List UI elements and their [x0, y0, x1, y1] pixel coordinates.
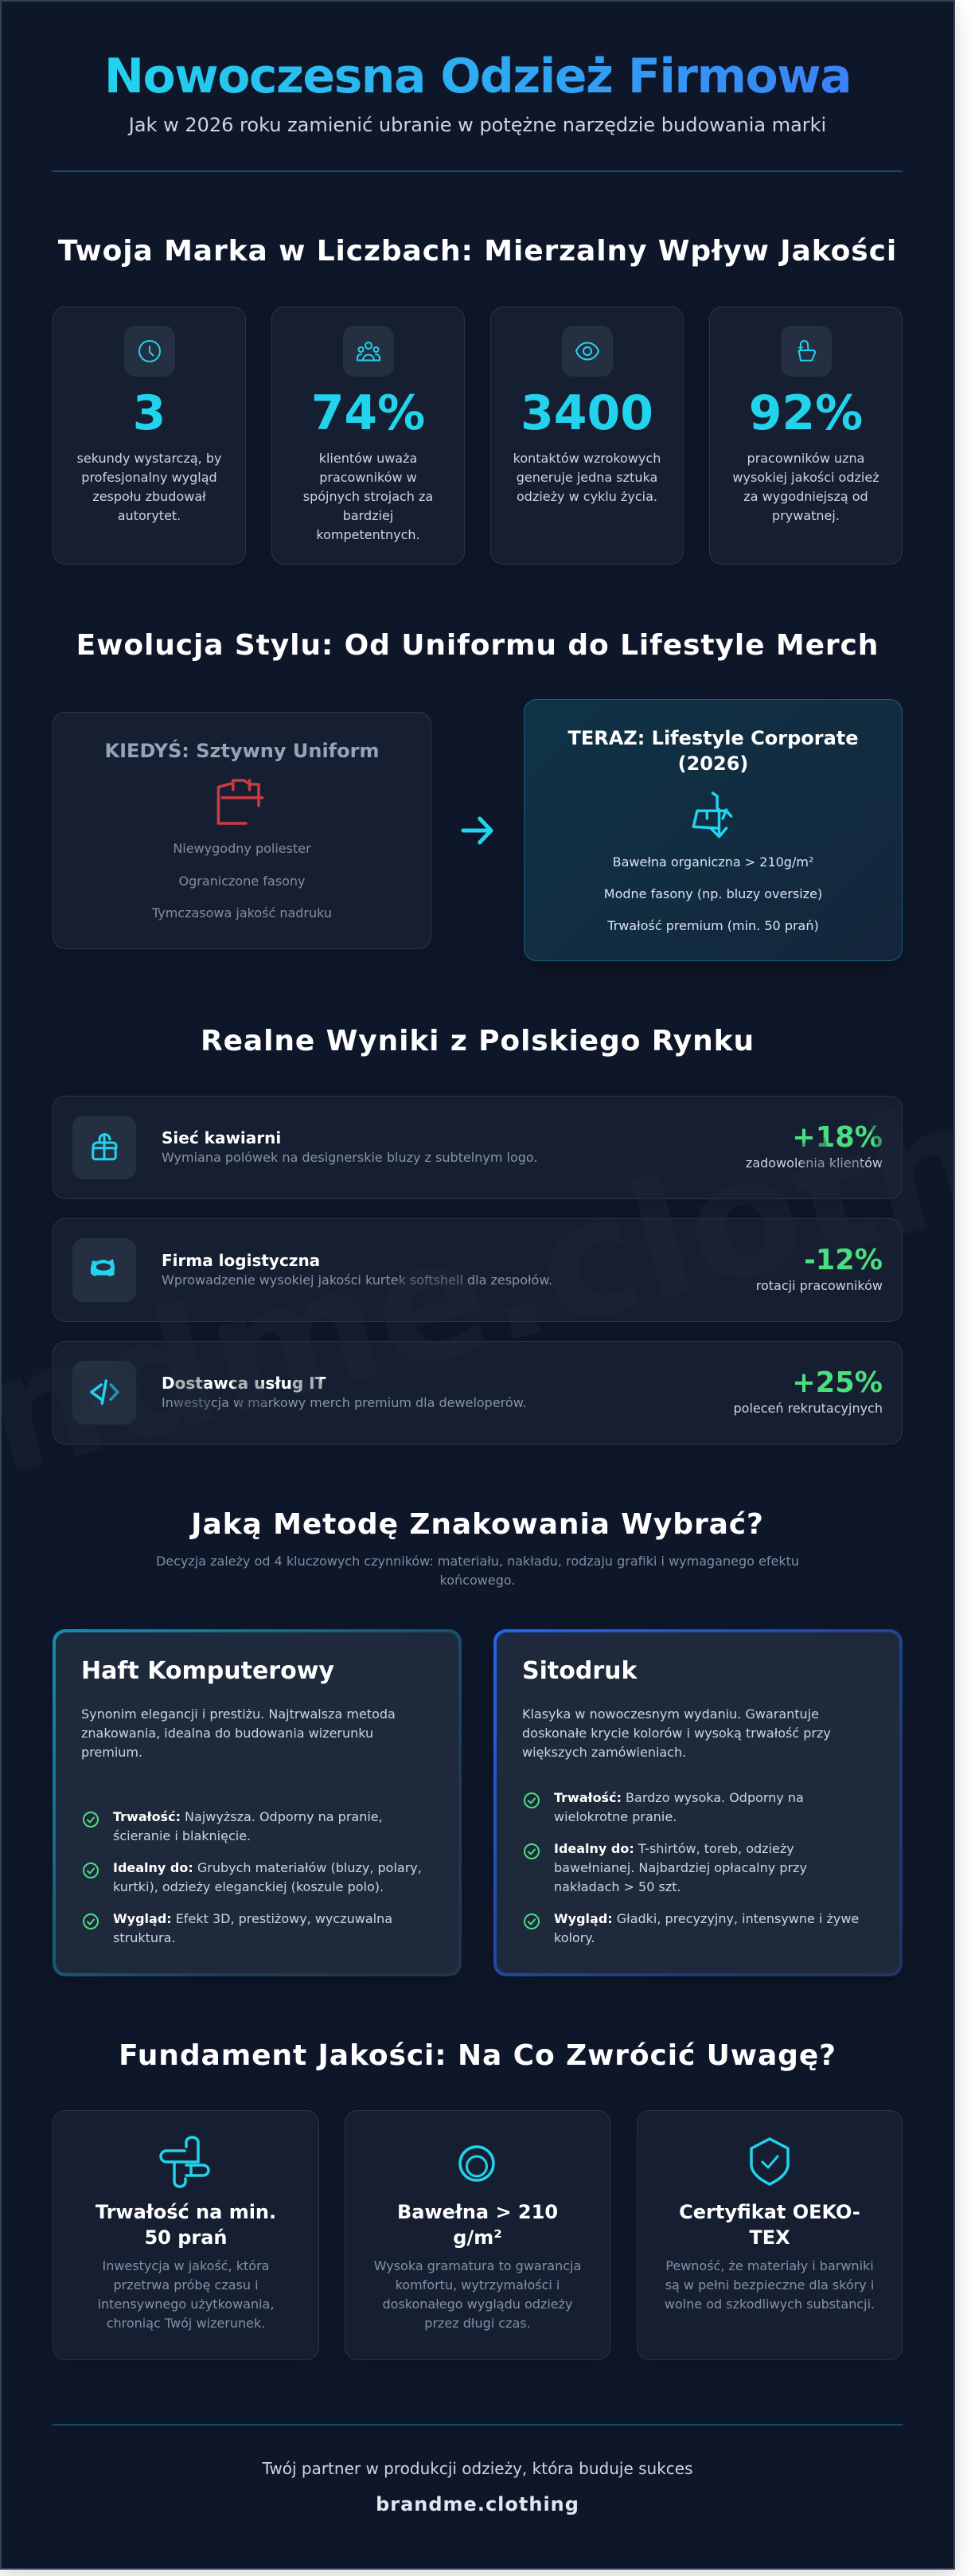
- feature: look: struktura.: [113, 1930, 175, 1945]
- stat description: odzieży w cyklu życia.: [517, 489, 657, 504]
- heading: stats: Twoja Marka w Liczbach: Mierzalny Wpływ Jakości: [58, 235, 897, 268]
- method description: Synonim elegancji i prestiżu. Najtrwalsza metoda: [81, 1706, 396, 1722]
- method description: większych zamówieniach.: [522, 1745, 686, 1760]
- panel: embroidery: [53, 1629, 462, 1976]
- panel: durability: [53, 2110, 319, 2360]
- case description: Inwestycja w markowy merch premium dla deweloperów.: [162, 1395, 526, 1410]
- panel: case coffee chain: [53, 1096, 903, 1199]
- case description: Wprowadzenie wysokiej jakości kurtek softshell dla zespołów.: [162, 1272, 552, 1288]
- stat description: kompetentnych.: [316, 527, 420, 542]
- feature: look: [524, 1911, 859, 1945]
- panel: stat 74 percent: [271, 307, 465, 565]
- intro text: Decyzja zależy od 4 kluczowych czynników: materiału, nakładu, rodzaju grafiki i wymaganego efektu: [156, 1554, 799, 1569]
- icon: washing durability: [159, 2136, 210, 2188]
- case result label: zadowolenia klientów: [746, 1155, 883, 1171]
- icon: clock: [124, 326, 175, 377]
- stat description: spójnych strojach za: [303, 489, 433, 504]
- method title: Haft Komputerowy: [81, 1657, 334, 1685]
- intro text: [156, 1554, 799, 1588]
- panel heading: before: KIEDYŚ: Sztywny Uniform: [105, 740, 379, 762]
- feature: ideal for: [83, 1860, 422, 1894]
- feature: durability: ścieranie i blaknięcie.: [113, 1828, 251, 1843]
- stat description: [303, 451, 433, 542]
- panel: screen printing: [493, 1629, 903, 1976]
- panel heading: now: (2026): [678, 752, 748, 775]
- stat number: 92%: [749, 385, 863, 441]
- panel: stat 3400: [490, 307, 684, 565]
- feature: durability: Trwałość: Najwyższa. Odporny na pranie,: [113, 1809, 383, 1824]
- panel: before: [53, 712, 431, 949]
- icon: bag: [780, 326, 831, 377]
- icon: stiff uniform: [216, 779, 264, 825]
- list: now: Modne fasony (np. bluzy oversize): [604, 886, 822, 901]
- method description: znakowania, idealna do budowania wizerunku: [81, 1726, 373, 1741]
- case result label: rotacji pracowników: [756, 1278, 883, 1293]
- card title: [96, 2201, 276, 2249]
- list: before: Tymczasowa jakość nadruku: [152, 905, 332, 921]
- stat description: sekundy wystarczą, by: [77, 451, 221, 466]
- panel heading: now: [567, 727, 859, 775]
- method description: premium.: [81, 1745, 142, 1760]
- footer tagline: Twój partner w produkcji odzieży, która buduje sukces: [262, 2459, 693, 2478]
- heading: evolution: Ewolucja Stylu: Od Uniformu do Lifestyle Merch: [76, 629, 879, 662]
- feature: ideal for: Idealny do: Grubych materiałów (bluzy, polary,: [113, 1860, 422, 1875]
- feature: ideal for: bawełnianej. Najbardziej opłacalny przy: [554, 1860, 807, 1875]
- case title: Sieć kawiarni: [162, 1128, 281, 1147]
- method title: Sitodruk: [522, 1657, 637, 1685]
- method description: [522, 1706, 831, 1760]
- method description: [81, 1706, 396, 1760]
- card description: są w pełni bezpieczne dla skóry i: [665, 2277, 874, 2293]
- stat number: 3: [133, 385, 166, 441]
- icon: cotton roll: [458, 2145, 495, 2182]
- card description: Wysoka gramatura to gwarancja: [374, 2258, 581, 2273]
- icon: code: [72, 1361, 136, 1425]
- heading: quality: Fundament Jakości: Na Co Zwrócić Uwagę?: [119, 2039, 836, 2072]
- feature: durability: wielokrotne pranie.: [554, 1809, 677, 1824]
- card description: przetrwa próbę czasu i: [113, 2277, 259, 2293]
- stat description: kontaktów wzrokowych: [513, 451, 661, 466]
- panel: case IT: [53, 1341, 903, 1444]
- stat description: [732, 451, 879, 523]
- stat description: pracowników uzna: [747, 451, 864, 466]
- feature: look: Wygląd: Gładki, precyzyjny, intensywne i żywe: [554, 1911, 859, 1926]
- case result: +25%: [792, 1366, 883, 1399]
- card description: intensywnego użytkowania,: [98, 2297, 274, 2312]
- icon: modern garment: [692, 792, 732, 838]
- stat description: prywatnej.: [772, 508, 840, 523]
- case title: Firma logistyczna: [162, 1251, 320, 1270]
- stat description: generuje jedna sztuka: [517, 470, 657, 485]
- list: now: Trwałość premium (min. 50 prań): [607, 918, 819, 933]
- panel: stat 92 percent: [709, 307, 903, 565]
- list: before: Niewygodny poliester: [173, 841, 311, 856]
- feature: ideal for: Idealny do: T-shirtów, toreb, odzieży: [554, 1841, 794, 1856]
- panel: certificate: [637, 2110, 903, 2360]
- stat description: [513, 451, 661, 504]
- stat description: bardziej: [343, 508, 393, 523]
- title: Nowoczesna Odzież Firmowa: [104, 49, 851, 104]
- icon: eye: [562, 326, 613, 377]
- feature: durability: [524, 1790, 804, 1824]
- feature: ideal for: nakładach > 50 szt.: [554, 1879, 681, 1894]
- feature: durability: Trwałość: Bardzo wysoka. Odporny na: [554, 1790, 804, 1805]
- card description: Pewność, że materiały i barwniki: [665, 2258, 874, 2273]
- card description: doskonałego wyglądu odzieży: [382, 2297, 572, 2312]
- card title: TEX: [749, 2226, 790, 2249]
- stat description: pracowników w: [319, 470, 417, 485]
- case result: -12%: [804, 1244, 883, 1276]
- feature: look: Wygląd: Efekt 3D, prestiżowy, wyczuwalna: [113, 1911, 392, 1926]
- feature: ideal for: [524, 1841, 807, 1894]
- case description: Wymiana polówek na designerskie bluzy z subtelnym logo.: [162, 1150, 537, 1165]
- card description: [374, 2258, 581, 2331]
- panel heading: now: TERAZ: Lifestyle Corporate: [567, 727, 859, 749]
- list: before: Ograniczone fasony: [179, 874, 305, 889]
- case result label: poleceń rekrutacyjnych: [734, 1401, 883, 1416]
- list: before: [151, 841, 332, 921]
- feature: look: [83, 1911, 392, 1945]
- stat description: wysokiej jakości odzież: [732, 470, 879, 485]
- method description: Klasyka w nowoczesnym wydaniu. Gwarantuje: [522, 1706, 819, 1722]
- method description: doskonałe krycie kolorów i wysoką trwałość przy: [522, 1726, 831, 1741]
- subtitle: Jak w 2026 roku zamienić ubranie w potężne narzędzie budowania marki: [129, 114, 826, 136]
- heading: results: Realne Wyniki z Polskiego Rynku: [201, 1025, 755, 1057]
- heading: marking methods: Jaką Metodę Znakowania Wybrać?: [191, 1508, 764, 1541]
- case title: Dostawca usług IT: [162, 1374, 326, 1393]
- card title: g/m²: [453, 2226, 502, 2249]
- stat number: 74%: [311, 385, 425, 441]
- stat description: za wygodniejszą od: [743, 489, 868, 504]
- icon: shield: [750, 2137, 790, 2186]
- feature: ideal for: kurtki), odzieży eleganckiej (koszule polo).: [113, 1879, 384, 1894]
- case result: +18%: [792, 1121, 883, 1154]
- arrow: [462, 817, 493, 844]
- icon: people: [342, 326, 393, 377]
- feature: durability: [83, 1809, 383, 1843]
- card title: Trwałość na min.: [96, 2201, 276, 2223]
- intro text: końcowego.: [440, 1573, 515, 1588]
- panel: cotton: [345, 2110, 610, 2360]
- card title: [397, 2201, 558, 2249]
- card description: komfortu, wytrzymałości i: [396, 2277, 560, 2293]
- icon: logistics: [72, 1238, 136, 1302]
- icon: coffee chain: [72, 1116, 136, 1179]
- card title: [679, 2201, 860, 2249]
- card title: Certyfikat OEKO-: [679, 2201, 860, 2223]
- stat description: autorytet.: [118, 508, 181, 523]
- card title: 50 prań: [144, 2226, 228, 2249]
- panel: case logistics: [53, 1218, 903, 1322]
- stat description: klientów uważa: [319, 451, 417, 466]
- stat number: 3400: [521, 385, 653, 441]
- list: now: Bawełna organiczna > 210g/m²: [613, 854, 813, 870]
- card description: chroniąc Twój wizerunek.: [107, 2316, 265, 2331]
- list: now: [604, 854, 822, 933]
- panel: stat 3 seconds: [53, 307, 246, 565]
- card description: [98, 2258, 274, 2331]
- footer brand: brandme.clothing: [376, 2493, 579, 2515]
- stat description: profesjonalny wygląd: [81, 470, 217, 485]
- stat description: [77, 451, 221, 523]
- card description: wolne od szkodliwych substancji.: [665, 2297, 875, 2312]
- stat description: zespołu zbudował: [92, 489, 206, 504]
- card description: przez długi czas.: [424, 2316, 531, 2331]
- card description: [665, 2258, 875, 2312]
- panel: now: [524, 699, 903, 961]
- card title: Bawełna > 210: [397, 2201, 558, 2223]
- feature: look: kolory.: [554, 1930, 595, 1945]
- card description: Inwestycja w jakość, która: [103, 2258, 269, 2273]
